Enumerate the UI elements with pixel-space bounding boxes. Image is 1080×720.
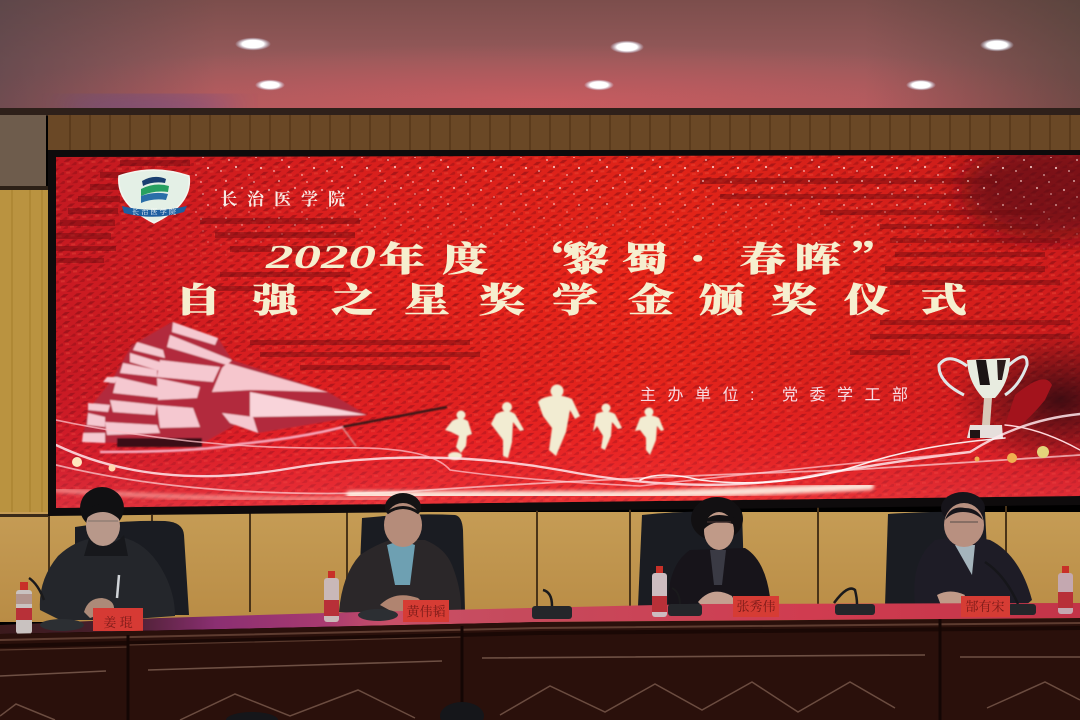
runner 2 (491, 402, 524, 458)
LED screen slide (50, 140, 1080, 510)
sailing ship (82, 322, 447, 452)
college logo (119, 170, 189, 223)
runner 3 (538, 384, 580, 456)
person 2 (339, 493, 461, 616)
title line 1: name: 年度“黎蜀·春晖” (379, 232, 896, 281)
five running figures (445, 384, 664, 460)
title line 2: 自强之星奖学金颁奖仪式 (175, 273, 967, 322)
person 1 (40, 487, 175, 620)
wooden beam above screen (0, 108, 1080, 191)
college logo: 长治医学院 (132, 207, 176, 216)
college name: 长治医学院 (220, 190, 345, 209)
dark moire stripes (56, 160, 1070, 370)
name plate 4: 郜有宋 (965, 599, 1005, 614)
wood wall panels (0, 190, 1080, 622)
name plate 1 (93, 608, 143, 631)
ceiling with recessed lights (0, 0, 1080, 120)
sparkle dots (190, 157, 1080, 267)
table top surface (0, 603, 1080, 634)
name plate 3 (733, 596, 779, 617)
screen background (50, 140, 1080, 510)
bottle 3 (652, 566, 667, 617)
flowing light waves (56, 414, 1080, 499)
water bottles (16, 566, 1073, 634)
person 4 (914, 492, 1032, 612)
title line 1: year: 2020 (264, 239, 376, 276)
name plate 2 (403, 600, 449, 622)
bottle 1 (16, 582, 32, 634)
chairs (75, 511, 990, 615)
microphones (29, 562, 1036, 631)
runner 5 (635, 408, 664, 455)
bottle 4 (1058, 566, 1073, 614)
runner 1 (445, 410, 472, 460)
person 3 (668, 497, 770, 605)
name plate 4 (961, 596, 1010, 617)
organizer text: 主办单位: 党委学工部 (640, 386, 908, 404)
audience heads at bottom edge (226, 702, 484, 720)
name plate 3: 张秀伟 (736, 599, 776, 614)
trophy (939, 357, 1052, 440)
name plate 2: 黄伟韬 (406, 604, 446, 619)
bottle 2 (324, 571, 339, 622)
LED screen frame (48, 150, 1080, 516)
name plate 1: 姜 琨 (103, 615, 133, 630)
table front panels (0, 618, 1080, 720)
runner 4 (593, 404, 622, 450)
